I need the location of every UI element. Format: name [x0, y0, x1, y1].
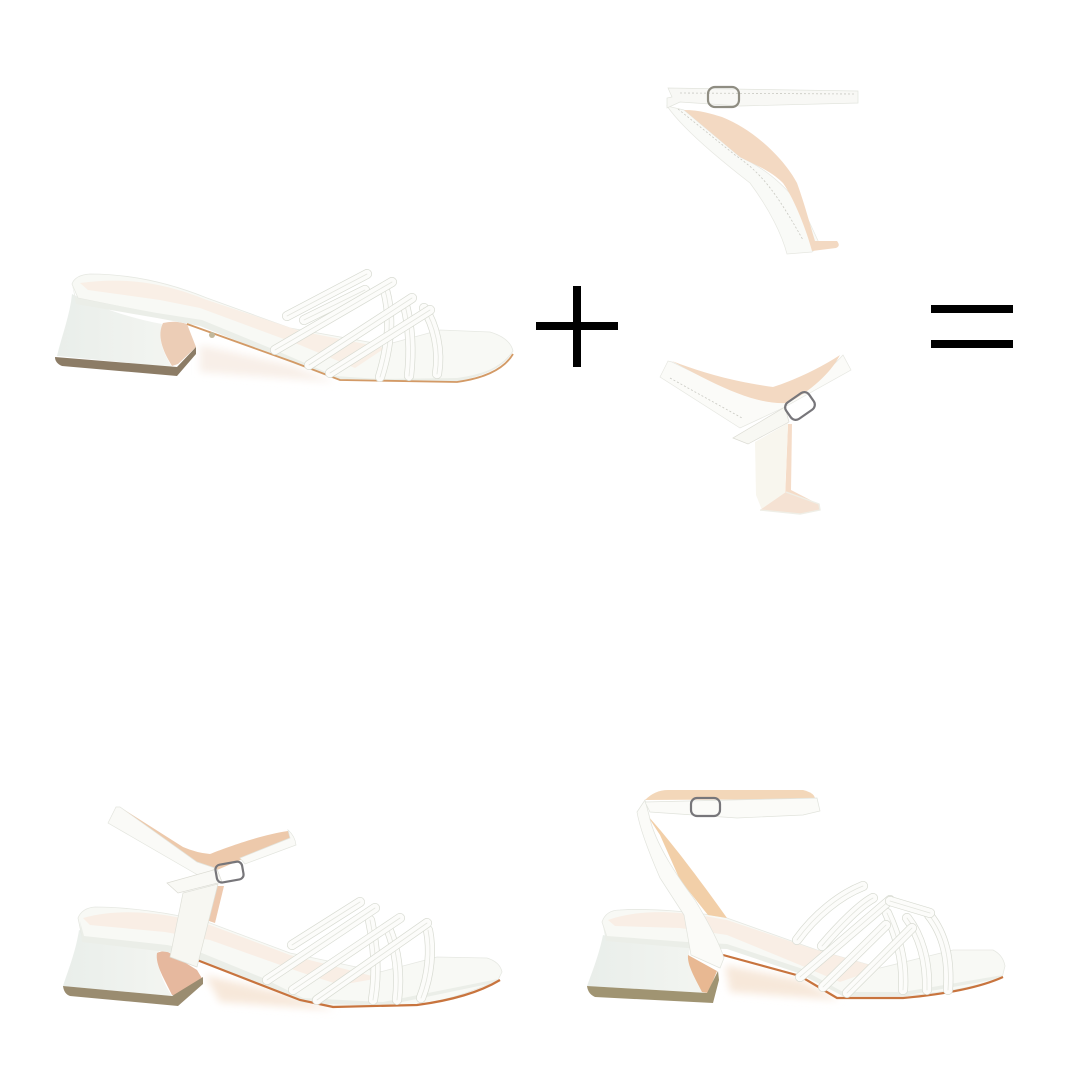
t-sandal buckle — [215, 861, 244, 883]
accessory strap body — [667, 106, 820, 254]
t-strap vertical — [755, 423, 788, 513]
ankle-sandal straps — [797, 886, 948, 993]
slide heel block — [57, 294, 172, 367]
ankle-sandal outsole — [723, 955, 1003, 998]
sandal with ankle strap — [587, 790, 1005, 1003]
equals sign — [931, 305, 1013, 348]
t-sandal ankle collar — [108, 807, 215, 878]
slide outsole line — [187, 324, 513, 382]
t-sandal insole — [83, 912, 380, 985]
slide heel cutout — [160, 322, 196, 366]
ankle-sandal buckle — [691, 798, 720, 816]
t-sandal pink tongue — [206, 886, 224, 923]
t-sandal front strap — [240, 830, 296, 864]
plus sign — [536, 286, 618, 367]
sandal with t-strap — [63, 807, 502, 1010]
t-strap pink edge — [785, 424, 820, 513]
ankle-sandal long strap — [637, 800, 724, 968]
slide footbed — [72, 274, 513, 381]
t-sandal heel sole — [63, 977, 203, 1006]
ankle-sandal insole — [608, 912, 880, 982]
t-strap buckle — [783, 390, 817, 422]
ankle-sandal belt — [645, 798, 820, 818]
t-strap belt — [733, 407, 789, 444]
ankle strap accessory — [667, 87, 858, 254]
t-sandal straps — [267, 902, 430, 1000]
ankle-sandal heel block — [587, 935, 707, 993]
ankle-sandal lining — [647, 815, 727, 918]
ankle-sandal belt lining — [645, 790, 815, 800]
ankle-sandal rim — [603, 926, 1003, 996]
slide sandal — [55, 274, 513, 382]
t-sandal belt — [167, 869, 222, 893]
t-sandal heel block — [63, 930, 172, 996]
ankle-sandal footbed — [602, 909, 1005, 996]
t-sandal outsole — [197, 960, 500, 1007]
ankle-sandal heel sole — [587, 971, 719, 1003]
accessory belt — [667, 88, 858, 108]
t-sandal vertical strap — [170, 884, 218, 967]
t-sandal footbed — [78, 907, 502, 1006]
slide straps — [275, 274, 438, 377]
slide heel sole — [55, 347, 196, 376]
accessory buckle — [708, 87, 739, 107]
ankle-sandal heel cutout — [688, 955, 717, 993]
t-strap collar — [660, 355, 851, 428]
t-strap accessory — [660, 355, 851, 514]
slide heel pin — [209, 332, 215, 338]
t-sandal heel cutout — [157, 951, 203, 995]
slide insole — [80, 281, 385, 368]
t-strap lining — [672, 355, 840, 403]
accessory lining — [684, 110, 839, 251]
t-sandal strap lining — [120, 807, 292, 870]
t-sandal rim — [80, 921, 498, 1006]
slide rim — [72, 284, 513, 381]
